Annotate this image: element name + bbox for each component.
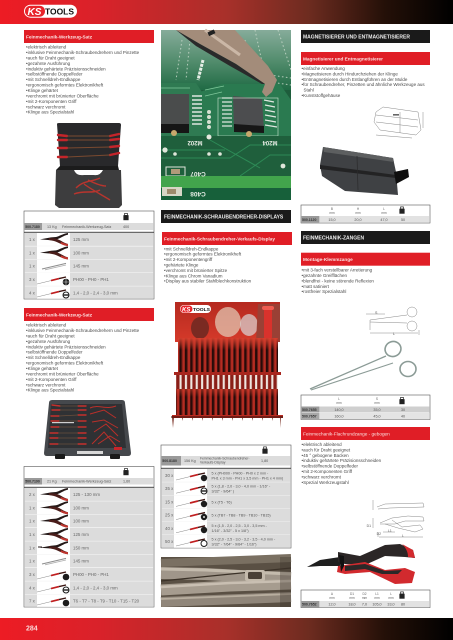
icon: weight (123, 213, 129, 220)
text block: left set 2 features: •schwarz verchromt (26, 382, 66, 387)
table row: 50 x socket: 5 x (2,0 - 2,5 - 3,0 - 3,2 - 3,5 - 4,0 mm - (212, 537, 276, 541)
table row: pliers 100 mm bent: 100 mm (73, 519, 89, 524)
table row: 50 x socket: 3/32" - 7/64" - 9/64" - 1/16") (212, 542, 257, 546)
lower board (161, 136, 291, 176)
table: clamp spec (301, 395, 430, 420)
table row: pliers 100 mm: 100 mm (73, 505, 89, 510)
text block: magnetizer features: •für Schraubendreher, Pinzetten und ähnliche Werkzeuge aus (302, 82, 425, 87)
table row: article 500.7655: 35,0 (373, 408, 381, 412)
photo: closed-layout tool case (44, 400, 131, 459)
icon: weight (262, 447, 268, 454)
diagram: clamp dimensions: L (393, 332, 395, 336)
text block: left set 2 features: •Klinge aus Spezialstahl (26, 388, 74, 393)
table: set 2 contents (24, 466, 154, 607)
table row: article code: Feinmechanik-Werkzeug-Satz (62, 480, 111, 484)
table row: 30 x Phillips: PH1 x 3 mm - PH1 x 3,5 mm - PH1 x 4 mm) (212, 476, 283, 480)
diagram: clamp dimensions (366, 307, 419, 336)
table: pliers spec: mm (329, 596, 335, 600)
panel: magnetizer heading (301, 52, 430, 65)
text block: flat nose pliers features: •schwarz verchromt (302, 474, 342, 479)
text block: left set 2 features: •ergonomisch geformtes Elektronikheft (26, 361, 104, 366)
table row: slotted screwdrivers: 4 x (29, 290, 36, 295)
text block: left set 1 features: •elektrisch ableitend (26, 45, 67, 50)
text block: clamp features: •blendfrei - keine störende Reflexion (302, 278, 374, 283)
table row: article 500.7652 (301, 601, 430, 607)
table row: Phillips screwdrivers: 3 x (29, 277, 36, 282)
icon: weight (399, 207, 405, 214)
table row: tweezers 145 mm: 145 mm (73, 559, 89, 564)
heading band: precision pliers (301, 231, 430, 244)
text block: magnetizer features: •Kunststoffgehäuse (302, 93, 341, 98)
photo: steel clamp (310, 339, 416, 390)
text block: left set 2 features: •verchromt mit brünierter Oberfläche (26, 371, 99, 376)
table row: pliers 125 mm (24, 233, 154, 246)
text block: magnetizer features (302, 66, 425, 98)
text block: flat nose pliers features: •auch für Draht geeignet (302, 447, 351, 452)
text block: magnetizer features: •einfache Anwendung (302, 66, 345, 71)
table: magnetizer spec (301, 205, 430, 223)
photo: pliers on circuit board (161, 29, 291, 200)
table row: pliers 150 mm: 150 mm (73, 545, 89, 550)
table row: 25 x Torx tamper (161, 509, 291, 522)
panel: left set 1 heading: Feinmechanik-Werkzeug-Satz (26, 34, 93, 40)
table row: article 500.7657: 500.7657 (302, 414, 317, 418)
table row: pliers 125 mm: 1 x (29, 237, 36, 242)
table row: pliers 100 mm: 100 mm (73, 250, 89, 255)
table row: article code: 1,60 (123, 480, 130, 484)
table row: pliers 125 mm: 125 mm (73, 532, 89, 537)
footer band with page number (0, 618, 453, 640)
panel: clamp heading (301, 253, 430, 266)
table row: Phillips screwdrivers (24, 568, 154, 581)
logo on display (180, 305, 211, 314)
text block: flat nose pliers features (302, 442, 382, 485)
chip: left (161, 94, 189, 132)
table row: article code: Feinmechanik-Werkzeug-Satz (62, 225, 111, 229)
table: magnetizer spec: L (383, 207, 385, 211)
table row: article 500.1120: 50 (401, 218, 405, 222)
photo: pliers on circuit board: M202 (187, 139, 203, 145)
panel: display heading (162, 232, 292, 245)
text block: flat nose pliers features: •selbstöffnende Doppelfeder (302, 464, 359, 469)
heading band: screwdriver displays (161, 210, 291, 223)
diagram: pliers dimensions (367, 500, 424, 538)
logo: KS Tools (24, 5, 77, 18)
panel: magnetizer heading: Magnetisierer und Entmagnetisierer (303, 56, 383, 62)
table: pliers spec: D1 (350, 592, 354, 596)
table row: pliers 150 mm: 1 x (29, 545, 36, 550)
table row: article code: 500.7180 (25, 225, 40, 229)
text block: left set 1 features: •selbstöffnende Doppelfeder (26, 72, 83, 77)
photo: open tool case with screwdrivers and pliers (55, 123, 122, 208)
table row: article 500.1120: 15,0 (328, 218, 336, 222)
table row: pliers 150 mm (24, 541, 154, 554)
table: pliers spec: mm (362, 596, 367, 600)
table row: 30 x Phillips: 5 x (PH000 - PH00 - PH0 x 2 mm - (212, 471, 269, 475)
table: pliers spec: mm (374, 596, 380, 600)
heading band: screwdriver displays: FEINMECHANIK-SCHRAUBENDREHER-DISPLAYS (164, 215, 284, 221)
table row: article 500.7652: 7,0 (362, 603, 367, 607)
icon: weight (399, 592, 405, 599)
heading band: precision pliers: FEINMECHANIK-ZANGEN (303, 236, 364, 242)
table row: Phillips screwdrivers (24, 273, 154, 286)
table row: pliers 100 mm (24, 501, 154, 514)
text block: clamp features: •mit 3-fach verstellbarer Arretierung (302, 268, 373, 273)
table: magnetizer spec: mm (329, 211, 335, 215)
logo: KS Tools: KS (28, 7, 42, 18)
panel: left set 1 heading (24, 30, 154, 43)
table: set 1 contents (24, 211, 154, 299)
text block: left set 1 features: •schwarz verchromt (26, 104, 66, 109)
text block: left set 1 features: •Klinge aus Spezialstahl (26, 110, 74, 115)
text block: display features (164, 246, 252, 284)
panel: flat nose pliers heading: Feinmechanik-Flachrundzange - gebogen (303, 432, 390, 436)
table: display contents (161, 445, 291, 548)
table row: 50 x socket (161, 535, 291, 548)
table: magnetizer spec: mm (355, 211, 361, 215)
table: magnetizer spec: mm (381, 211, 387, 215)
table row: Torx screwdrivers: T6 - T7 - T8 - T9 - T10 - T15 - T20 (73, 599, 140, 604)
text block: left set 1 features: •mit 2-Komponenten Griff (26, 99, 77, 104)
photo: red sales display with screwdrivers (171, 302, 283, 428)
panel: left set 2 heading (24, 308, 154, 321)
table row: article 500.7652: 105,0 (372, 603, 382, 607)
table row: pliers 125 mm (24, 528, 154, 541)
table: pliers spec: L1 (375, 592, 379, 596)
logo: KS Tools: TOOLS (45, 8, 75, 17)
text block: left set 2 features: •Klinge gehärtet (26, 366, 59, 371)
table row: article code (161, 456, 291, 466)
text block: left set 1 features: •ergonomisch geformtes Elektronikheft (26, 83, 104, 88)
table row: 40 x hex (161, 522, 291, 535)
table row: Phillips screwdrivers: PH00 - PH0 - PH1 (73, 572, 109, 577)
table row: 40 x hex: 40 x (165, 526, 174, 531)
table row: article 500.1120 (301, 216, 430, 223)
table row: slotted screwdrivers: 1,4 - 2,0 - 2,4 - 3,0 mm (73, 585, 118, 590)
diagram: clamp dimensions: S (375, 311, 378, 315)
text block: left set 1 features: •Klinge gehärtet (26, 88, 59, 93)
text block: left set 2 features: •inklusive Feinmechanik-Schraubendrehern und Pinzette (26, 328, 140, 333)
text block: left set 2 features: •selbstöffnende Doppelfeder (26, 350, 83, 355)
table: pliers spec (301, 590, 430, 608)
logo on display: TOOLS (193, 307, 210, 312)
chip: right (233, 96, 264, 132)
text block: magnetizer features: •Magnetisieren durch Hindurchziehen der Klinge (302, 71, 398, 76)
table row: pliers 100 mm: 1 x (29, 505, 36, 510)
table: pliers spec: A (331, 592, 334, 596)
table row: article 500.7657: 45,0 (373, 414, 381, 418)
diagram: magnetizer dimensions (374, 107, 423, 138)
table: pliers spec: mm (349, 596, 355, 600)
table row: pliers 125-130 mm: 2 x (29, 492, 36, 497)
logo on display: KS (182, 308, 190, 314)
table row: 35 x slotted: 3/32" - 9/64" ) (212, 490, 234, 494)
text block: left set 2 features: •gezahnte Ausführung (26, 339, 71, 344)
table: magnetizer spec: B (331, 207, 333, 211)
text block: flat nose pliers features: •induktiv gehärtete Präzisionsschneiden (302, 458, 382, 463)
table: pliers spec: L (390, 592, 392, 596)
table row: article 500.7652: 500.7652 (302, 603, 317, 607)
text block: display features: •mit Schnelldreh-Endkappe (164, 246, 219, 251)
text block: left set 2 features: •auch für Draht geeignet (26, 333, 75, 338)
table row: tweezers 145 mm: 1 x (29, 559, 36, 564)
table row: pliers 100 mm (24, 246, 154, 259)
table row: article 500.1120: 47,0 (380, 218, 388, 222)
table row: article code: 1,80 (261, 459, 268, 463)
table row: 40 x hex: 5 x (1,5 - 2,0 - 2,5 - 3,0 - 3,5 mm - (212, 524, 268, 528)
table row: 50 x socket: 50 x (165, 539, 174, 544)
table row: article 500.7655 (301, 406, 430, 412)
text block: flat nose pliers features: •45 ° gebogene Backen (302, 453, 349, 458)
table row: article 500.7657 (301, 413, 430, 419)
text block: clamp features: •matt satiniert (302, 284, 330, 289)
diagram: pliers dimensions: L (402, 534, 404, 538)
table row: 25 x Torx tamper: 5 x (TB7 - TB8 - TB9 - TB10 - TB15) (212, 514, 271, 518)
text block: left set 1 features: •gezahnte Ausführung (26, 61, 71, 66)
photo: pliers on circuit board: C408 (190, 190, 206, 197)
table row: 30 x Phillips: 30 x (165, 473, 174, 478)
text block: flat nose pliers features: •mit 2-Komponenten Griff (302, 469, 353, 474)
photo: screwdriver shafts close-up (161, 557, 291, 607)
table row: article code: Feinmechanik-Schraubendreher- (200, 457, 250, 461)
table row: Torx screwdrivers: 7 x (29, 599, 36, 604)
table row: pliers 125-130 mm: 125 - 130 mm (73, 492, 100, 497)
text block: left set 1 features: •inklusive Feinmechanik-Schraubendrehern und Pinzette (26, 50, 140, 55)
table row: 15 x Torx: 15 x (165, 499, 174, 504)
text block: clamp features: •rostfreier Spezialstahl (302, 289, 346, 294)
table row: Phillips screwdrivers: 3 x (29, 572, 36, 577)
table row: article 500.7655: 30 (401, 408, 405, 412)
table row: slotted screwdrivers (24, 286, 154, 299)
table row: article code: 400 (123, 225, 129, 229)
text block: left set 2 features: •elektrisch ableitend (26, 323, 67, 328)
table row: article code (24, 223, 154, 230)
table row: pliers 100 mm bent: 1 x (29, 519, 36, 524)
table row: article 500.7657: 160,0 (334, 414, 344, 418)
table: magnetizer spec: H (357, 207, 360, 211)
diagram: pliers dimensions: L1 (388, 529, 392, 533)
photo: magnetizer box (320, 147, 409, 195)
text block: magnetizer features: •Entmagnetisieren durch Entlangführen an der Mulde (302, 77, 408, 82)
header band (0, 0, 453, 24)
heading band: magnetizer (301, 30, 430, 43)
text block: magnetizer features: Stahl (304, 88, 314, 93)
text block: display features: •Klinge aus Chrom Vanadium (164, 273, 223, 278)
table: pliers spec: mm (388, 596, 394, 600)
table row: tweezers 145 mm: 145 mm (73, 264, 89, 269)
text block: left set 1 features: •induktiv gehärtete Präzisionsschneiden (26, 66, 106, 71)
table row: article 500.7652: 33,0 (387, 603, 395, 607)
text block: left set 1 features: •verchromt mit brünierter Oberfläche (26, 93, 99, 98)
icon: weight (399, 397, 405, 404)
table row: article code: 500.8180 (162, 459, 177, 463)
text block: left set 2 features: •mit 2-Komponenten Griff (26, 377, 77, 382)
heading band: magnetizer: MAGNETISIERER UND ENTMAGNETISIERER (303, 35, 410, 41)
table row: pliers 125-130 mm (24, 488, 154, 501)
table row: article code (24, 478, 154, 484)
pliers tip (176, 30, 277, 97)
table row: article code: 13 Kg (47, 225, 57, 229)
table row: article 500.7657: 40 (401, 414, 405, 418)
table row: article 500.7655: 500.7655 (302, 408, 317, 412)
table: clamp spec: mm (336, 401, 342, 405)
table row: 35 x slotted: 5 x (1,8 - 2,0 - 3,0 - 4,0 mm - 1/16" - (212, 485, 271, 489)
table row: 15 x Torx (161, 495, 291, 508)
table: clamp spec: L (338, 397, 340, 401)
text block: left set 2 features (26, 323, 140, 393)
text block: clamp features: •gezahnte Greifflächen (302, 273, 348, 278)
table row: 30 x Phillips (161, 469, 291, 482)
panel: display heading: Feinmechanik-Schraubendreher-Verkaufs-Display (164, 236, 275, 242)
photo: red and black pliers (307, 544, 415, 584)
table row: article code: Verkaufs-Display (200, 461, 226, 465)
table row: article 500.7655: 140,0 (334, 408, 344, 412)
table row: 15 x Torx: 5 x (T5 - T6) (212, 500, 232, 504)
table row: tweezers 145 mm: 1 x (29, 264, 36, 269)
table row: Torx screwdrivers (24, 595, 154, 607)
table row: pliers 100 mm: 1 x (29, 250, 36, 255)
table row: pliers 100 mm bent (24, 515, 154, 528)
table: pliers spec: D2 (362, 592, 367, 596)
text block: flat nose pliers features: •Spezial Werkzeugstahl (302, 480, 349, 485)
table row: article code: 21 Kg (47, 480, 57, 484)
text block: left set 1 features (26, 45, 140, 115)
table row: article 500.7652: 18,0 (348, 603, 356, 607)
diagram: pliers dimensions: D2 (377, 532, 381, 536)
text block: clamp features (302, 268, 374, 294)
table row: 25 x Torx tamper: 25 x (165, 513, 174, 518)
table row: slotted screwdrivers: 1,4 - 2,0 - 2,4 - 3,0 mm (73, 290, 118, 295)
text block: left set 1 features: •auch für Draht geeignet (26, 55, 75, 60)
table row: article code: 156 Kg (184, 459, 196, 463)
table: clamp spec: mm (374, 401, 380, 405)
table: clamp spec: S (376, 397, 378, 401)
photo: pliers on circuit board: M204 (262, 139, 278, 145)
text block: left set 1 features: •mit Schnelldreh-Endkappe (26, 77, 81, 82)
text block: display features: •Display aus stabiler Stahlblechkonstruktion (164, 279, 252, 284)
table row: 40 x hex: 1/16" - 3/32" - 5 x 1/8") (212, 529, 249, 533)
table row: slotted screwdrivers: 4 x (29, 585, 36, 590)
text block: display features: •mit 2-Komponentengriff (164, 257, 213, 262)
text block: display features: •ergonomisch geformtes Elektronikheft (164, 252, 242, 257)
table row: tweezers 145 mm (24, 555, 154, 568)
photo: pliers on circuit board: C407 (190, 170, 206, 177)
panel: flat nose pliers heading (301, 427, 430, 440)
table row: article 500.7652: 12,0 (328, 603, 336, 607)
table row: pliers 125 mm: 125 mm (73, 237, 89, 242)
diagram: pliers dimensions: D1 (367, 524, 371, 528)
panel: clamp heading: Montage-Klemmzange (303, 257, 353, 262)
text block: display features: •verchromt mit brünierter Spitze (164, 268, 228, 273)
table row: Phillips screwdrivers: PH00 - PH0 - PH1 (73, 277, 109, 282)
text block: display features: •gehärtete Klinge (164, 262, 199, 268)
table row: pliers 125 mm: 1 x (29, 532, 36, 537)
table row: article 500.1120: 20,0 (354, 218, 362, 222)
table row: 35 x slotted: 35 x (165, 486, 174, 491)
text block: flat nose pliers features: •elektrisch ableitend (302, 442, 342, 447)
text block: left set 2 features: •mit Schnelldreh-Endkappe (26, 355, 81, 360)
table row: article 500.1120: 500.1120 (302, 218, 316, 222)
icon: weight (123, 468, 129, 475)
footer band with page number: 284 (26, 626, 38, 632)
table row: 35 x slotted (161, 482, 291, 495)
panel: left set 2 heading: Feinmechanik-Werkzeug-Satz (26, 312, 93, 318)
table row: tweezers 145 mm (24, 260, 154, 273)
text block: left set 2 features: •induktiv gehärtete Präzisionsschneiden (26, 344, 106, 349)
table row: slotted screwdrivers (24, 581, 154, 594)
table row: article 500.7652: 80 (401, 603, 405, 607)
table row: article code: 500.7190 (25, 480, 40, 484)
